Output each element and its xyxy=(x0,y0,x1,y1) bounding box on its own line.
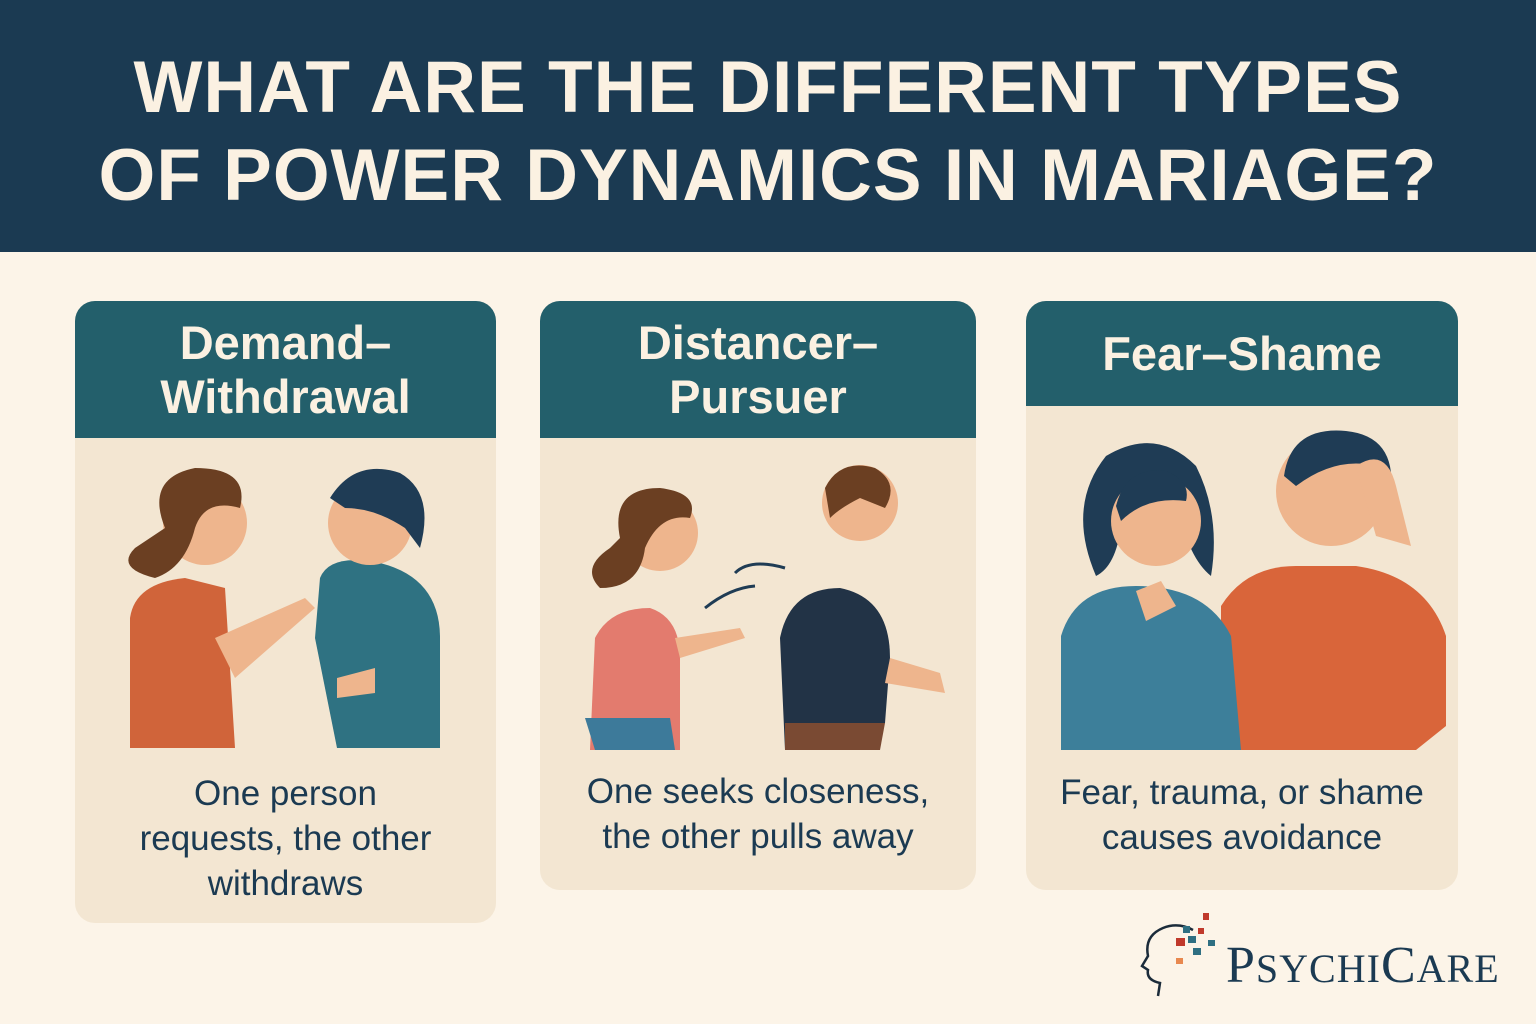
panel: distancer-pursuer xyxy=(540,301,976,890)
title: WHAT ARE THE DIFFERENT TYPES xyxy=(134,47,1402,128)
illustration: arguing couple xyxy=(128,468,440,748)
logo: PsychiCare xyxy=(1140,913,1500,996)
description xyxy=(1060,773,1424,857)
title xyxy=(99,47,1437,216)
description: the other pulls away xyxy=(602,817,914,856)
description: Fear, trauma, or shame xyxy=(1060,773,1424,812)
header band xyxy=(0,0,1536,252)
description: withdraws xyxy=(208,864,363,903)
heading: demand-withdrawal: Demand– xyxy=(180,316,391,368)
illustration: pursuing couple xyxy=(585,465,945,750)
heading: distancer-pursuer xyxy=(540,301,976,438)
heading: demand-withdrawal xyxy=(75,301,496,438)
description: causes avoidance xyxy=(1102,818,1382,857)
description: requests, the other xyxy=(140,819,431,858)
description xyxy=(140,774,431,903)
description: One seeks closeness, xyxy=(587,772,929,811)
title: OF POWER DYNAMICS IN MARIAGE? xyxy=(99,135,1437,216)
panel: fear-shame xyxy=(1026,301,1458,890)
logo text: PSYCHICARE xyxy=(1226,937,1500,994)
panel: demand-withdrawal xyxy=(75,301,496,923)
heading: distancer-pursuer: Pursuer xyxy=(669,370,847,422)
illustration: anxious couple xyxy=(1061,430,1446,750)
heading: fear-shame: Fear–Shame xyxy=(1102,326,1382,380)
description xyxy=(587,772,929,856)
heading: fear-shame xyxy=(1026,301,1458,406)
heading: distancer-pursuer: Distancer– xyxy=(638,316,878,368)
icon: head with mosaic xyxy=(1140,913,1215,996)
heading: demand-withdrawal: Withdrawal xyxy=(160,370,411,422)
description: One person xyxy=(194,774,377,813)
